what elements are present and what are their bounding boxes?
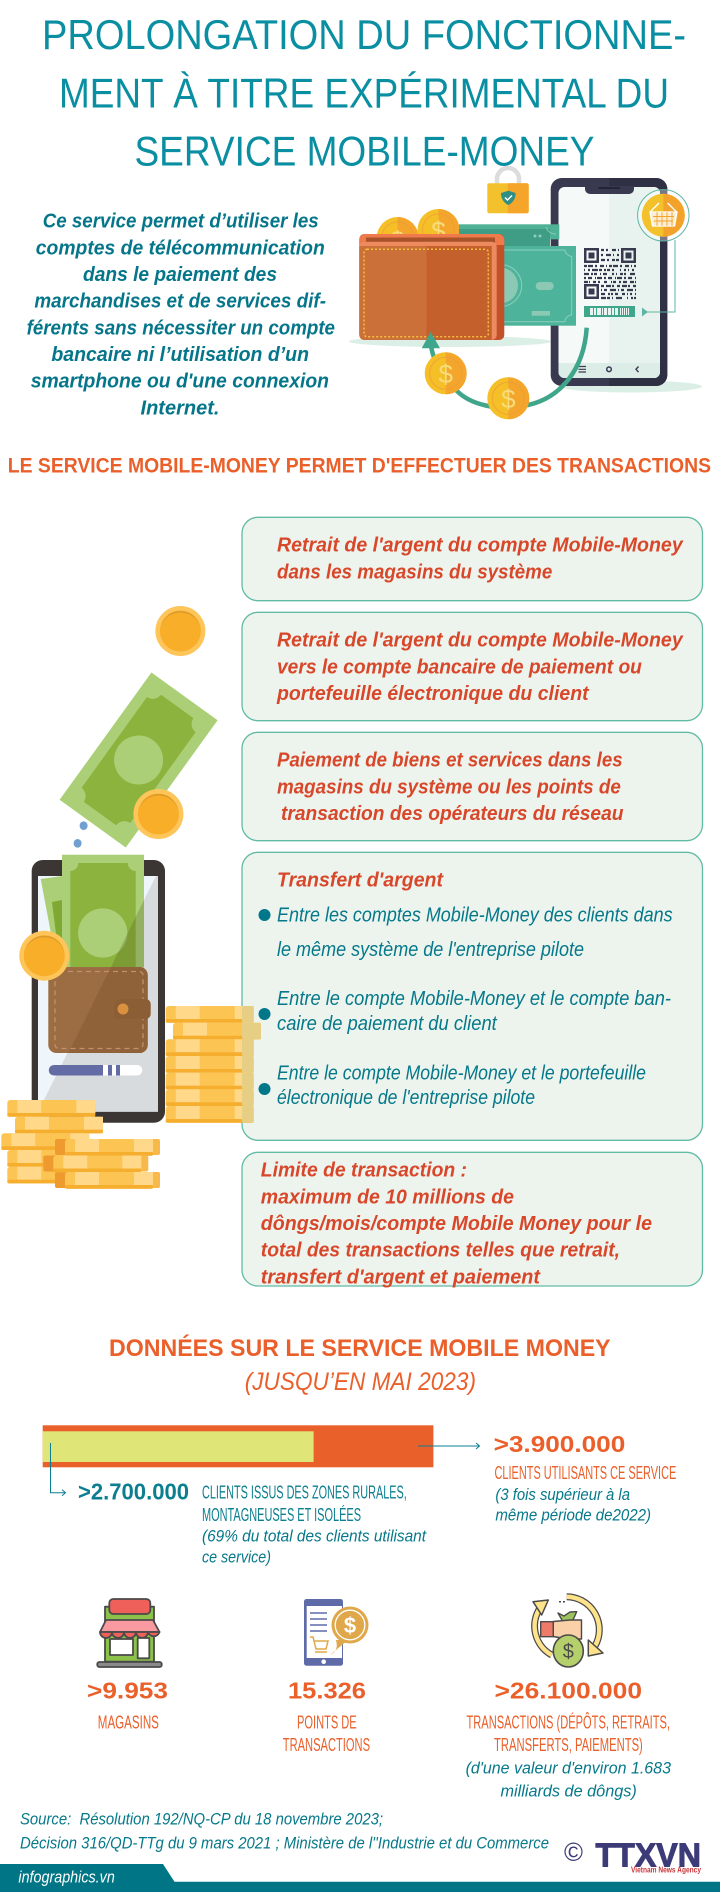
icon: shopping basket (638, 190, 689, 241)
panel: money transfer: Entre les comptes Mobile-Money des clients dans (277, 905, 673, 927)
wallet (359, 234, 504, 340)
stat: rural clients (78, 1478, 427, 1567)
icon: phone with payment bubble (304, 1599, 368, 1666)
stat: shops: MAGASINS (98, 1712, 159, 1732)
panel: withdrawal to bank account: vers le compte bancaire de paiement ou (277, 655, 642, 678)
icon: coins in wallet: $ (391, 227, 404, 254)
icon: coins in wallet: $ (431, 216, 446, 246)
panel: transaction limit: maximum de 10 millions de (261, 1185, 514, 1208)
arrow with coins back to wallet (422, 328, 587, 419)
panel: withdrawal to bank account: portefeuille électronique du client (276, 682, 590, 705)
bullets: money transfer list (258, 909, 270, 1095)
heading: data: (JUSQU’EN MAI 2023) (245, 1368, 476, 1396)
stat: shops (87, 1677, 168, 1732)
panel: money transfer: Entre le compte Mobile-Money et le compte ban- (277, 988, 671, 1010)
panel: withdrawal in shops (242, 517, 702, 601)
panel: money transfer: le même système de l'entreprise pilote (277, 939, 584, 961)
icon: right coin stack (166, 1006, 261, 1123)
icon: note in wallet (62, 855, 144, 970)
panel: withdrawal to bank account: Retrait de l'argent du compte Mobile-Money (277, 629, 684, 652)
intro text block: bancaire ni l’utilisation d’un (51, 343, 309, 366)
stat: transaction points (283, 1677, 370, 1755)
progress bar on phone (49, 1065, 142, 1076)
source: Décision 316/QD-TTg du 9 mars 2021 ; Ministère de l''Industrie et du Commerce (20, 1833, 549, 1852)
intro text block (27, 210, 335, 419)
arrow with coins back to wallet: $ (438, 359, 453, 389)
icon: coins in wallet (377, 209, 460, 259)
icon: back note (41, 876, 62, 960)
title: SERVICE MOBILE-MONEY (134, 128, 594, 175)
icon: drops (74, 821, 88, 848)
stat: rural clients: >2.700.000 (78, 1478, 189, 1504)
stat: rural clients: CLIENTS ISSUS DES ZONES RURALES, (202, 1482, 407, 1502)
stat: total clients (494, 1431, 676, 1525)
panel: payment of goods and services: transaction des opérateurs du réseau (281, 802, 624, 825)
heading: data (109, 1334, 611, 1396)
bar chart: clients (43, 1425, 433, 1467)
panel: payment of goods and services: Paiement de biens et services dans les (277, 749, 623, 772)
icon: shop (97, 1599, 162, 1667)
panel: payment of goods and services: magasins du système ou les points de (277, 775, 621, 798)
stat: total clients: même période de2022) (495, 1506, 651, 1525)
panel: money transfer: Entre le compte Mobile-Money et le portefeuille (277, 1062, 646, 1084)
intro text block: smartphone ou d'une connexion (31, 370, 329, 393)
stat: transactions (466, 1677, 672, 1801)
stat: transactions: milliards de dôngs) (500, 1782, 637, 1801)
stat: shops: >9.953 (87, 1677, 168, 1703)
panel: money transfer (242, 852, 702, 1140)
footer band: infographics.vn (18, 1868, 115, 1887)
panel: transaction limit: total des transactions telles que retrait, (261, 1239, 620, 1262)
icon: money bag cycle: $ (563, 1641, 574, 1663)
logo: TTXVN: © (564, 1837, 583, 1867)
panel: money transfer: électronique de l'entreprise pilote (277, 1087, 535, 1109)
icon: QR code (584, 248, 636, 299)
icon: falling coin (155, 606, 205, 656)
icon: coin on phone (19, 931, 69, 981)
logo: TTXVN: Vietnam News Agency (631, 1866, 701, 1875)
panel: withdrawal in shops: Retrait de l'argent du compte Mobile-Money (277, 534, 684, 557)
stat: rural clients: (69% du total des clients utilisant (202, 1527, 427, 1546)
arrow to total clients (418, 1443, 480, 1449)
illustration: money falling into phone wallet with coin stacks (1, 606, 261, 1189)
intro text block: Internet. (140, 396, 220, 419)
icon: money bag cycle (533, 1597, 603, 1667)
stat: transaction points: POINTS DE (297, 1712, 357, 1732)
intro text block: Ce service permet d’utiliser les (43, 210, 319, 233)
panel: money transfer: Transfert d'argent (277, 869, 444, 892)
panel: transaction limit: dôngs/mois/compte Mobile Money pour le (261, 1212, 652, 1235)
illustration: wallet, phone with QR code and coins (349, 168, 702, 419)
intro text block: marchandises et de services dif- (34, 290, 326, 313)
logo: TTXVN: TTXVN (596, 1837, 701, 1874)
panel: transaction limit: transfert d'argent et paiement (261, 1265, 541, 1288)
stat: total clients: (3 fois supérieur à la (495, 1485, 630, 1504)
stat: total clients: >3.900.000 (494, 1431, 625, 1457)
icon: front coin stack (1, 1100, 160, 1189)
intro text block: comptes de télécommunication (36, 236, 325, 259)
footer band (0, 1864, 720, 1892)
icon: padlock (487, 168, 529, 213)
arrow to rural clients (50, 1443, 66, 1496)
heading: data: DONNÉES SUR LE SERVICE MOBILE MONEY (109, 1334, 611, 1362)
phone (32, 860, 165, 1123)
icon: coin over note (133, 789, 183, 839)
intro text block: férents sans nécessiter un compte (27, 316, 335, 339)
stat: rural clients: MONTAGNEUSES ET ISOLÉES (202, 1505, 361, 1525)
stat: transactions: >26.100.000 (494, 1677, 642, 1703)
phone (551, 178, 667, 386)
panel: payment of goods and services (242, 732, 702, 841)
source: Source: Résolution 192/NQ-CP du 18 novembre 2023; (20, 1809, 383, 1828)
panel: transaction limit (242, 1152, 702, 1288)
stat: rural clients: ce service) (202, 1548, 271, 1567)
bank notes (459, 224, 576, 326)
source (20, 1809, 549, 1852)
panel: transaction limit: Limite de transaction : (261, 1159, 467, 1182)
connector from basket to barcode (642, 240, 675, 316)
stat: transaction points: 15.326 (288, 1677, 366, 1703)
barcode (584, 306, 635, 317)
panel: money transfer: caire de paiement du client (277, 1013, 498, 1035)
panel: withdrawal in shops: dans les magasins du système (277, 560, 552, 583)
icon: phone with payment bubble: $ (344, 1613, 356, 1638)
intro text block: dans le paiement des (83, 263, 277, 286)
title (42, 11, 686, 175)
panel: withdrawal to bank account (242, 612, 702, 721)
stat: transactions: (d'une valeur d'environ 1.683 (466, 1758, 672, 1777)
icon: falling bank note (60, 672, 218, 848)
stat: transaction points: TRANSACTIONS (283, 1735, 370, 1755)
arrow with coins back to wallet: $ (501, 384, 516, 414)
icon: brown wallet (48, 967, 151, 1053)
